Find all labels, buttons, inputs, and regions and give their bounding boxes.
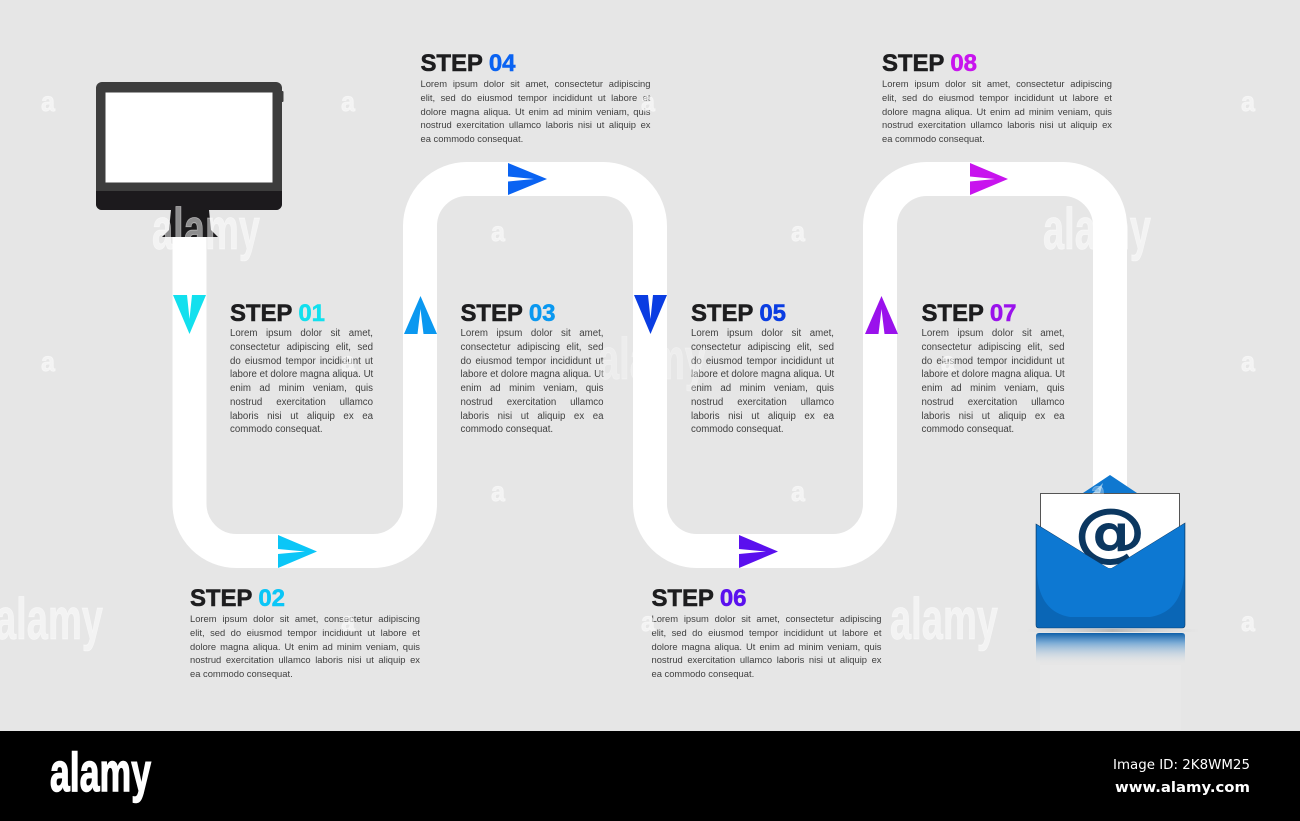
watermark overlay: a bbox=[341, 606, 355, 637]
body step 05: enim ad minim veniam, quis bbox=[691, 383, 834, 394]
body step 04: Lorem ipsum dolor sit amet, consectetur adipiscing bbox=[420, 78, 650, 89]
arrow: step 03 bbox=[404, 296, 437, 334]
watermark overlay: a bbox=[491, 216, 505, 247]
body step 07: commodo consequat. bbox=[922, 424, 1014, 435]
body step 03: nostrud exercitation ullamco bbox=[460, 397, 604, 408]
body step 01: enim ad minim veniam, quis bbox=[230, 383, 373, 394]
footer url: www.alamy.com bbox=[1115, 780, 1250, 796]
body step 04: dolore magna aliqua. Ut enim ad minim veniam, quis bbox=[420, 106, 650, 116]
step 08 text bbox=[882, 50, 1112, 144]
step 01 text bbox=[230, 300, 374, 435]
body step 02 bbox=[190, 613, 420, 679]
body step 02: elit, sed do eiusmod tempor incididunt ut labore et bbox=[190, 627, 420, 638]
body step 07 bbox=[922, 328, 1065, 435]
body step 04: ea commodo consequat. bbox=[420, 133, 523, 144]
watermark overlay: alamy bbox=[152, 197, 260, 262]
body step 08: elit, sed do eiusmod tempor incididunt ut labore et bbox=[882, 92, 1112, 103]
body step 01: Lorem ipsum dolor sit amet, bbox=[230, 328, 373, 339]
icon: open envelope with at sign bbox=[1025, 475, 1200, 730]
body step 06: ea commodo consequat. bbox=[652, 668, 754, 679]
watermark overlay: a bbox=[791, 216, 805, 247]
arrow: step 08 bbox=[970, 163, 1008, 195]
body step 05: Lorem ipsum dolor sit amet, bbox=[691, 328, 834, 339]
heading step 08: STEP 08 bbox=[882, 50, 977, 77]
heading step 02: STEP 02 bbox=[190, 585, 285, 612]
step 04 text bbox=[420, 50, 650, 144]
icon: open envelope with at sign: @ bbox=[1074, 496, 1146, 570]
arrow: step 06 bbox=[739, 535, 778, 568]
step 06 text bbox=[652, 585, 882, 679]
watermark overlay: a bbox=[341, 86, 355, 117]
arrow: step 07 bbox=[865, 296, 898, 334]
watermark overlay: a bbox=[1241, 606, 1255, 637]
body step 08: dolore magna aliqua. Ut enim ad minim veniam, quis bbox=[882, 106, 1112, 116]
heading step 05: STEP 05 bbox=[691, 300, 786, 327]
footer logo: alamy bbox=[50, 741, 151, 803]
watermark overlay: a bbox=[941, 346, 955, 377]
step 02 text bbox=[190, 585, 420, 679]
body step 01: do eiusmod tempor incididunt ut bbox=[230, 356, 373, 366]
body step 03: consectetur adipiscing elit, sed bbox=[460, 342, 604, 353]
watermark overlay: a bbox=[1241, 86, 1255, 117]
watermark overlay: alamy bbox=[1043, 197, 1151, 262]
body step 08: ea commodo consequat. bbox=[882, 133, 985, 144]
body step 04: elit, sed do eiusmod tempor incididunt ut labore et bbox=[420, 92, 650, 103]
body step 01: laboris nisi ut aliquip ex ea bbox=[230, 410, 373, 422]
heading step 07: STEP 07 bbox=[922, 300, 1016, 327]
body step 07: labore et dolore magna aliqua. Ut bbox=[922, 369, 1065, 380]
arrow: step 04 bbox=[508, 163, 547, 195]
watermark overlay: alamy bbox=[890, 587, 998, 652]
heading step 06: STEP 06 bbox=[652, 585, 746, 612]
arrow: step 05 bbox=[634, 295, 667, 334]
body step 02: dolore magna aliqua. Ut enim ad minim veniam, quis bbox=[190, 640, 420, 652]
body step 01 bbox=[230, 328, 374, 435]
heading step 03: STEP 03 bbox=[460, 300, 555, 327]
body step 03 bbox=[460, 328, 604, 435]
winding white path bbox=[189, 179, 1110, 551]
body step 03: labore et dolore magna aliqua. Ut bbox=[460, 369, 604, 380]
body step 05: laboris nisi ut aliquip ex ea bbox=[691, 410, 834, 422]
body step 07: do eiusmod tempor incididunt ut bbox=[922, 356, 1064, 366]
watermark overlay: a bbox=[1091, 476, 1105, 507]
step 07 text bbox=[922, 300, 1065, 435]
body step 02: ea commodo consequat. bbox=[190, 668, 293, 679]
body step 02: nostrud exercitation ullamco laboris nisi ut aliquip ex bbox=[190, 654, 420, 665]
body step 06: nostrud exercitation ullamco laboris nisi ut aliquip ex bbox=[652, 654, 882, 665]
body step 05: nostrud exercitation ullamco bbox=[691, 397, 834, 408]
body step 03: do eiusmod tempor incididunt ut bbox=[460, 356, 604, 366]
watermark overlay: a bbox=[41, 86, 55, 117]
watermark overlay: alamy bbox=[598, 327, 706, 392]
watermark overlay: a bbox=[791, 476, 805, 507]
body step 08: Lorem ipsum dolor sit amet, consectetur adipiscing bbox=[882, 78, 1112, 89]
body step 08 bbox=[882, 78, 1112, 144]
body step 07: laboris nisi ut aliquip ex ea bbox=[922, 410, 1064, 422]
body step 05: do eiusmod tempor incididunt ut bbox=[691, 356, 834, 366]
body step 05: consectetur adipiscing elit, sed bbox=[691, 342, 834, 353]
body step 08: nostrud exercitation ullamco laboris nisi ut aliquip ex bbox=[882, 119, 1112, 130]
heading step 01: STEP 01 bbox=[230, 300, 325, 327]
step 03 text bbox=[460, 300, 604, 435]
arrow: step 01 bbox=[173, 295, 206, 334]
watermark overlay: a bbox=[41, 346, 55, 377]
watermark overlay: a bbox=[641, 606, 655, 637]
body step 06: elit, sed do eiusmod tempor incididunt ut labore et bbox=[652, 627, 882, 638]
body step 01: nostrud exercitation ullamco bbox=[230, 397, 373, 408]
step 05 text bbox=[691, 300, 834, 435]
body step 03: commodo consequat. bbox=[460, 424, 553, 435]
body step 04: nostrud exercitation ullamco laboris nisi ut aliquip ex bbox=[420, 119, 650, 130]
footer bar bbox=[0, 731, 1300, 821]
body step 01: consectetur adipiscing elit, sed bbox=[230, 342, 373, 353]
arrow: step 02 bbox=[278, 535, 317, 568]
watermark overlay: a bbox=[1241, 346, 1255, 377]
body step 03: enim ad minim veniam, quis bbox=[460, 383, 604, 394]
body step 07: enim ad minim veniam, quis bbox=[922, 383, 1064, 394]
body step 07: consectetur adipiscing elit, sed bbox=[922, 342, 1064, 353]
heading step 04: STEP 04 bbox=[420, 50, 515, 77]
body step 06: dolore magna aliqua. Ut enim ad minim veniam, quis bbox=[652, 640, 882, 652]
body step 07: nostrud exercitation ullamco bbox=[922, 397, 1064, 408]
watermark overlay: a bbox=[491, 476, 505, 507]
footer image id: Image ID: 2K8WM25 bbox=[1113, 758, 1250, 773]
body step 02: Lorem ipsum dolor sit amet, consectetur adipiscing bbox=[190, 613, 420, 624]
icon: monitor bbox=[96, 82, 284, 237]
body step 07: Lorem ipsum dolor sit amet, bbox=[922, 328, 1064, 339]
body step 05: commodo consequat. bbox=[691, 424, 784, 435]
body step 01: commodo consequat. bbox=[230, 424, 323, 435]
body step 04 bbox=[420, 78, 650, 144]
body step 01: labore et dolore magna aliqua. Ut bbox=[230, 369, 373, 380]
body step 05: labore et dolore magna aliqua. Ut bbox=[691, 369, 834, 380]
watermark overlay: a bbox=[341, 346, 355, 377]
watermark overlay: a bbox=[641, 86, 655, 117]
body step 06 bbox=[652, 613, 882, 679]
body step 05 bbox=[691, 328, 834, 435]
body step 03: laboris nisi ut aliquip ex ea bbox=[460, 410, 604, 422]
body step 03: Lorem ipsum dolor sit amet, bbox=[460, 328, 604, 339]
body step 06: Lorem ipsum dolor sit amet, consectetur adipiscing bbox=[652, 613, 882, 624]
